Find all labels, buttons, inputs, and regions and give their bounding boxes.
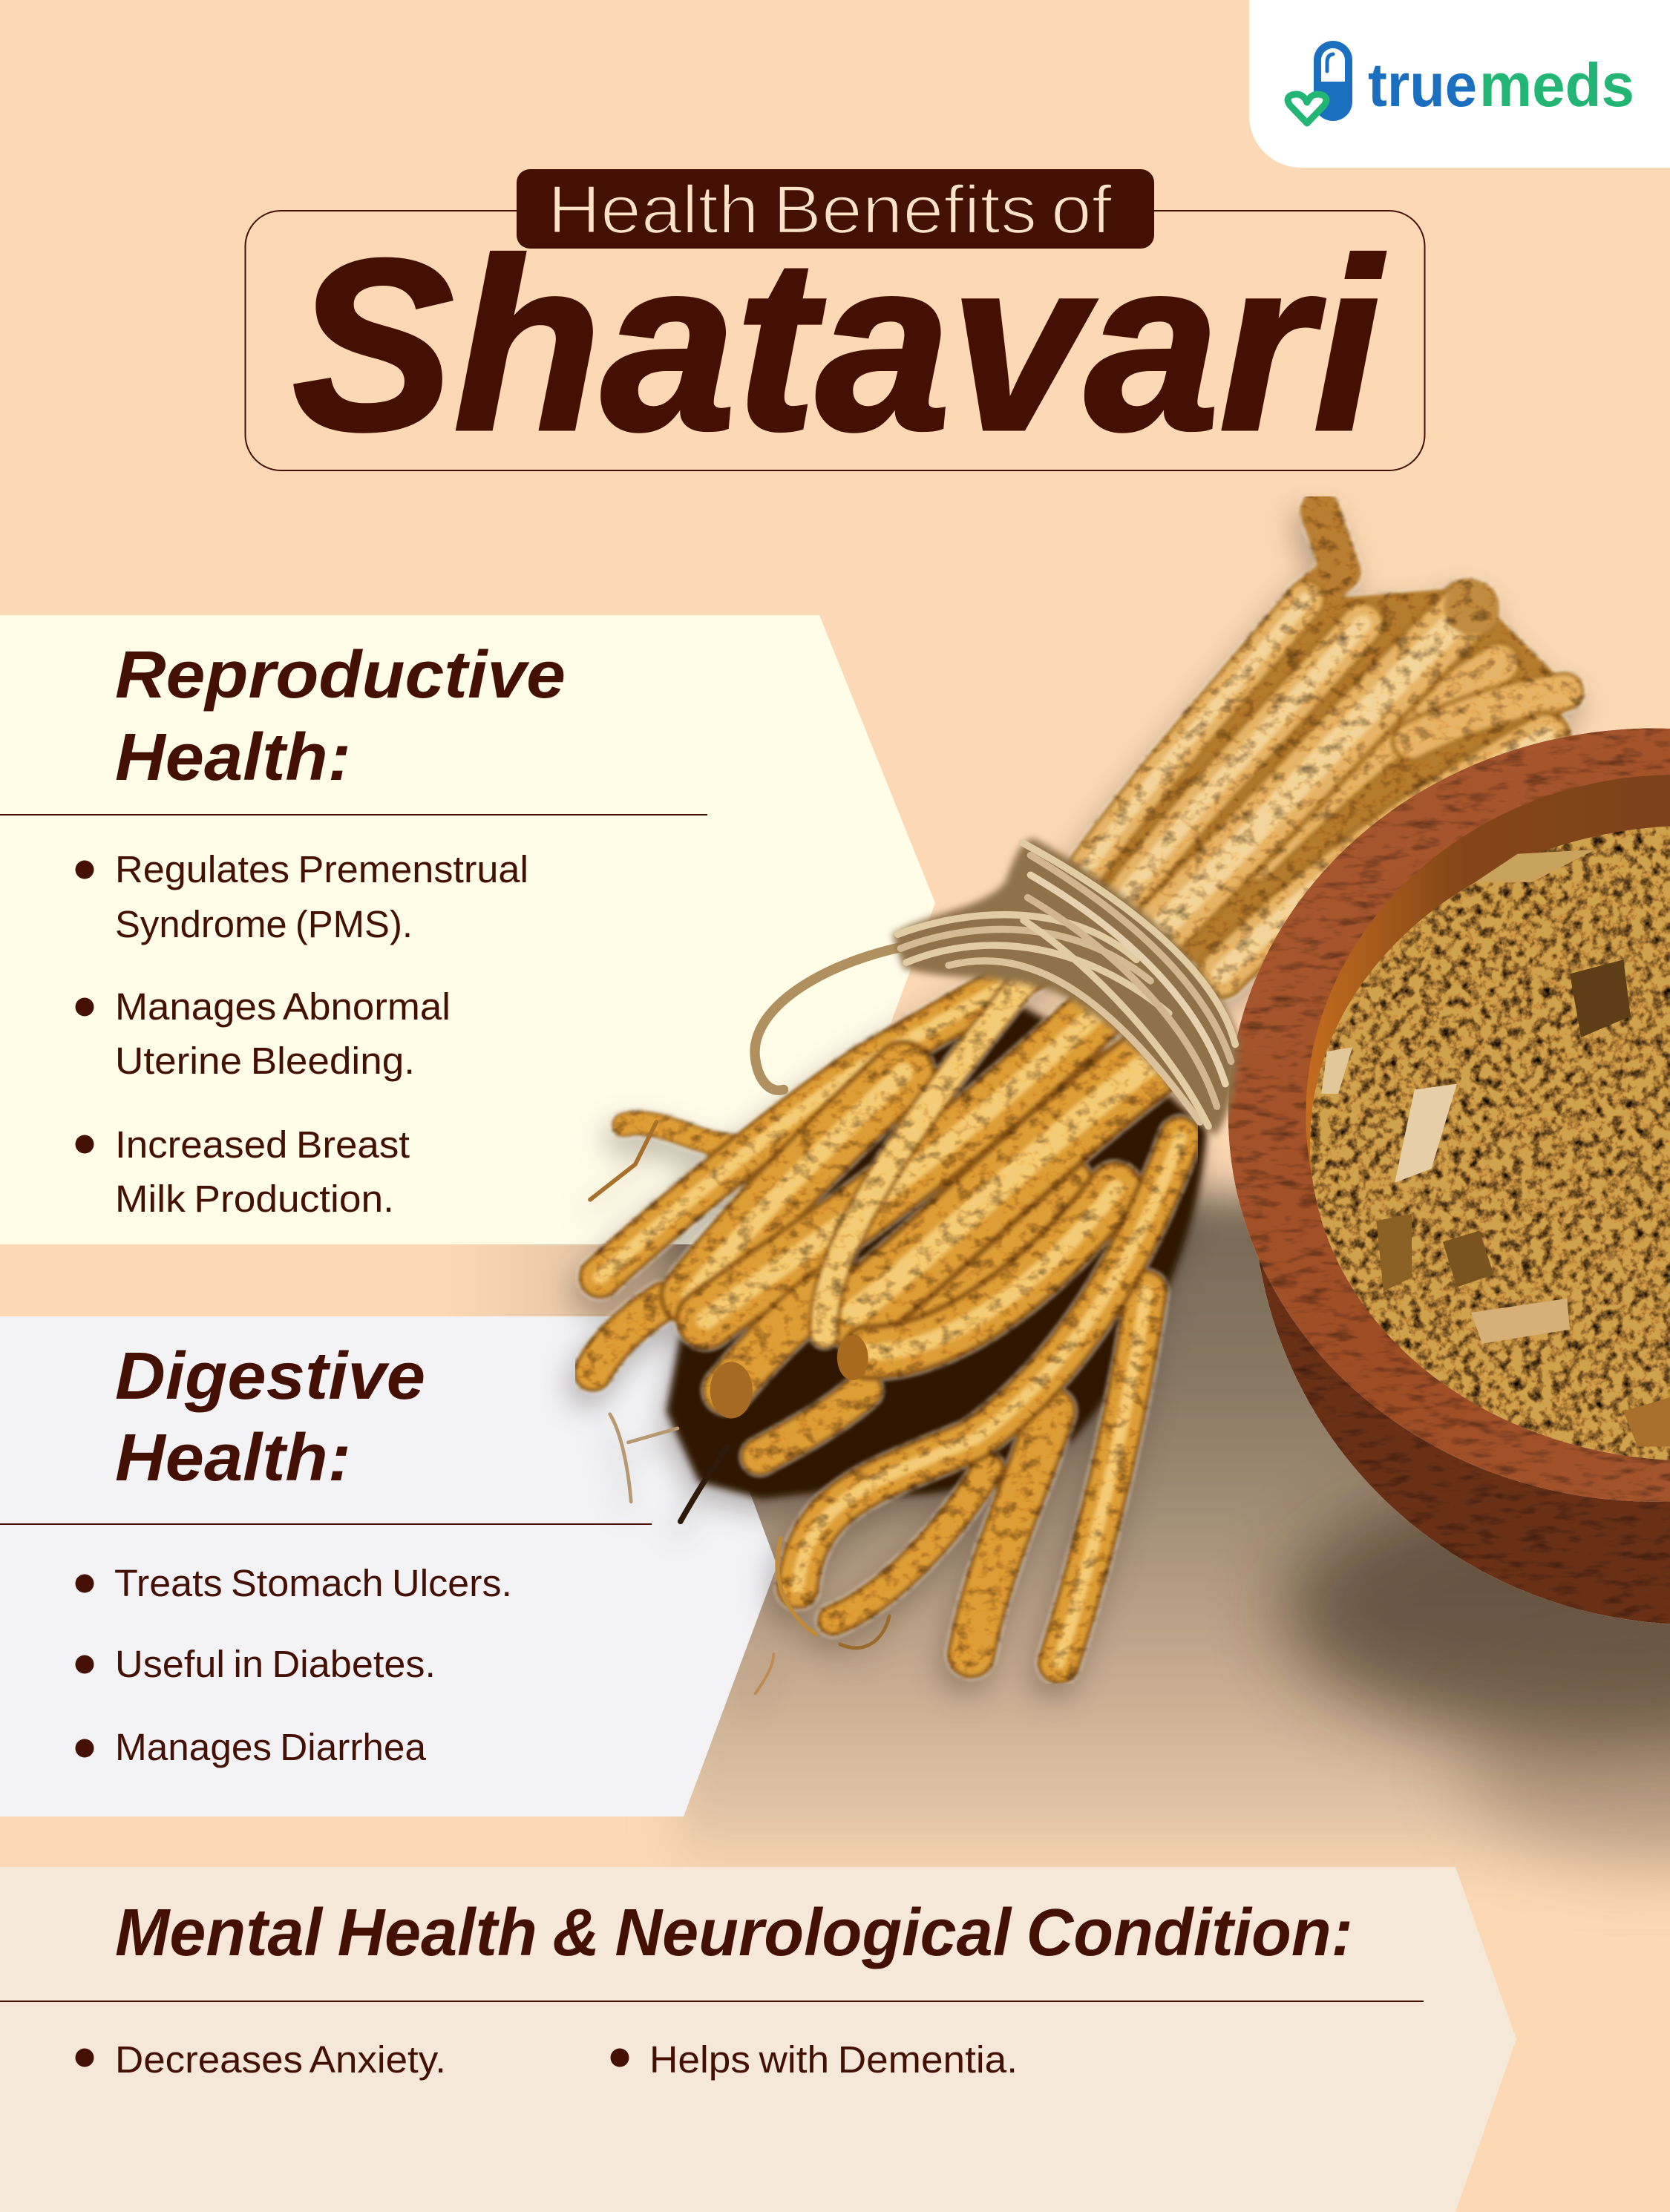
list: digestive benefits: Manages Diarrhea: [115, 1726, 427, 1768]
heading: Digestive Health: Digestive: [115, 1339, 425, 1414]
list: digestive benefits: Useful in Diabetes.: [115, 1643, 436, 1685]
heading: Reproductive Health: Reproductive: [115, 638, 566, 712]
panel: reproductive health: [0, 615, 935, 1244]
icon: capsule: [1314, 41, 1352, 121]
illustration: root bundle and bowl: [590, 511, 1670, 1693]
list: reproductive benefits: Increased Breast: [115, 1123, 410, 1166]
cut root ends and whiskers: [590, 1122, 889, 1693]
logo text: true: [1368, 50, 1477, 119]
heading: Digestive Health: Health:: [115, 1421, 351, 1495]
powder chunks: [1321, 850, 1670, 1447]
dark core of the bundle: [667, 988, 1207, 1499]
title: Shatavari: Shatavari: [292, 209, 1385, 481]
heading: Digestive Health: [115, 1339, 425, 1495]
list: reproductive benefits: Uterine Bleeding.: [115, 1040, 415, 1082]
title frame: [245, 211, 1425, 470]
list: mental health benefits: Helps with Dementia.: [649, 2038, 1018, 2081]
heading: Reproductive Health: [115, 638, 566, 795]
floor shadow under roots and bowl: [445, 1195, 1670, 1900]
lower roots: [590, 967, 1207, 1693]
panel: digestive health: [0, 1316, 777, 1816]
list: reproductive benefits: [76, 848, 528, 1220]
heading: Mental Health and Neurological Condition: Mental Health & Neurological Condition:: [115, 1896, 1353, 1970]
logo text: meds: [1479, 50, 1634, 119]
title pill: [517, 169, 1154, 249]
list: mental health benefits: Decreases Anxiety.: [115, 2038, 446, 2081]
list: reproductive benefits: Syndrome (PMS).: [115, 903, 413, 945]
list: digestive benefits: [76, 1562, 512, 1768]
icon: heart: [1288, 94, 1326, 123]
bowl body: [1254, 761, 1670, 1624]
upper roots: [1080, 511, 1574, 988]
twine: [755, 838, 1240, 1136]
list: reproductive benefits: Milk Production.: [115, 1178, 394, 1220]
bowl rim: [1228, 728, 1670, 1502]
powder: [1310, 826, 1670, 1461]
wooden bowl: [1228, 728, 1670, 1624]
list: reproductive benefits: Regulates Premenstrual: [115, 848, 528, 890]
list: digestive benefits: Treats Stomach Ulcers.: [114, 1562, 512, 1604]
list: reproductive benefits: Manages Abnormal: [115, 985, 451, 1028]
list: mental health benefits: [76, 2038, 1018, 2081]
logo tab: [1249, 0, 1670, 168]
logo text: [1368, 50, 1634, 119]
title line: Health Benefits of: Health Benefits of: [548, 172, 1112, 248]
bowl inner wall: [1306, 775, 1670, 1455]
heading: Reproductive Health: Health:: [115, 721, 351, 795]
panel: mental health and neurological condition: [0, 1867, 1516, 2212]
